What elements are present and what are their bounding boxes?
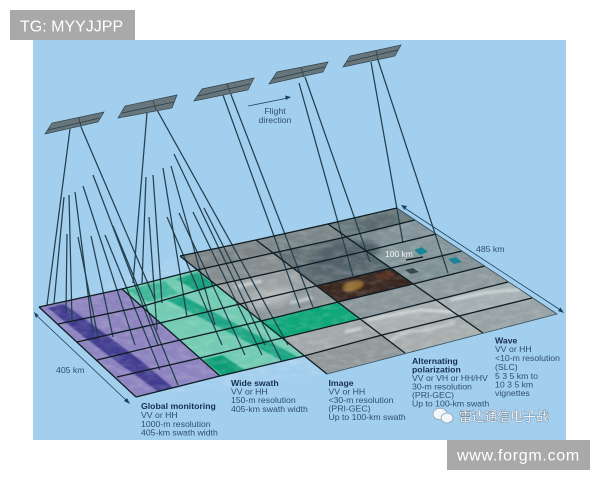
text: wave: 10 3 5 km — [495, 380, 533, 390]
text: wide swath: VV or HH — [231, 386, 268, 396]
text: image: <30-m resolution — [328, 395, 394, 405]
satellite 4 — [269, 62, 328, 84]
text: global monitoring: VV or HH — [141, 410, 178, 420]
text: wide swath: 150-m resolution — [231, 395, 296, 405]
label: 100 km: 100 km — [385, 249, 413, 259]
text: image: (PRI-GEC) — [328, 404, 371, 414]
text: wave: Wave — [495, 336, 518, 346]
text: wide swath: 405-km swath width — [231, 404, 308, 414]
text: wave: vignettes — [495, 388, 530, 398]
ground grid lines — [39, 208, 557, 397]
icon: teal vignette squares — [405, 247, 462, 274]
text: image: Image — [328, 378, 354, 388]
text: alternating polarization: VV or VH or HH/HV — [412, 373, 488, 383]
panel: sky blue background — [33, 40, 566, 440]
arrow: flight direction — [248, 96, 291, 106]
text: global monitoring: 405-km swath width — [141, 428, 218, 438]
text: wide swath: Wide swath — [231, 378, 279, 388]
text: alternating polarization — [412, 356, 489, 408]
panel: wide swath green strip — [122, 270, 304, 377]
text: global monitoring: 1000-m resolution — [141, 419, 211, 429]
satellite 2 — [118, 95, 177, 118]
text: wave: <10-m resolution — [495, 353, 560, 363]
text: global monitoring — [141, 401, 218, 438]
text: image: VV or HH — [328, 386, 365, 396]
satellite 5 — [343, 45, 401, 67]
text: alternating polarization: 30-m resolution — [412, 382, 472, 392]
text: alternating polarization: Up to 100-km swath — [412, 398, 489, 408]
panel: image and wave radar scene mosaic — [180, 208, 557, 374]
text: wave: 5 3 5 km to — [495, 371, 538, 381]
text: watermark channel name: 雷达通信电子战 — [459, 409, 549, 424]
tag: website label — [447, 440, 590, 470]
satellite 3 — [194, 78, 254, 101]
tag: TG label — [10, 10, 135, 40]
text: wide swath — [231, 378, 308, 414]
text: alternating polarization: (PRI-GEC) — [412, 390, 454, 400]
panel: dark brown scene cell — [316, 268, 413, 302]
text: alternating polarization: polarization — [412, 364, 461, 374]
label: flight direction: Flight — [264, 106, 286, 116]
satellite beams — [47, 60, 448, 385]
arrow: 485 km dimension — [401, 205, 564, 313]
tag: website label: www.forgm.com — [456, 448, 580, 464]
tag: TG label: TG: MYYJJPP — [20, 18, 123, 36]
panel: global monitoring purple swath — [39, 289, 220, 397]
label: 485 km: 485 km — [476, 244, 504, 254]
text: global monitoring: Global monitoring — [141, 401, 216, 411]
text: wave: VV or HH — [495, 344, 532, 354]
texture: radar grain over the ground scenes — [36, 205, 560, 400]
label: 405 km: 405 km — [56, 365, 84, 375]
label: flight direction: direction — [259, 115, 292, 125]
text: alternating polarization: Alternating — [412, 356, 458, 366]
text: wave — [495, 336, 560, 398]
text: image: Up to 100-km swath — [328, 412, 406, 422]
icon: chat watermark — [433, 408, 453, 423]
arrow: 100 km marker — [406, 257, 423, 260]
text: wave: (SLC) — [495, 362, 518, 372]
text: image — [328, 378, 406, 422]
panel: image mode green cell — [261, 302, 360, 338]
satellite 1 — [45, 112, 104, 134]
arrow: 405 km dimension — [34, 312, 130, 404]
